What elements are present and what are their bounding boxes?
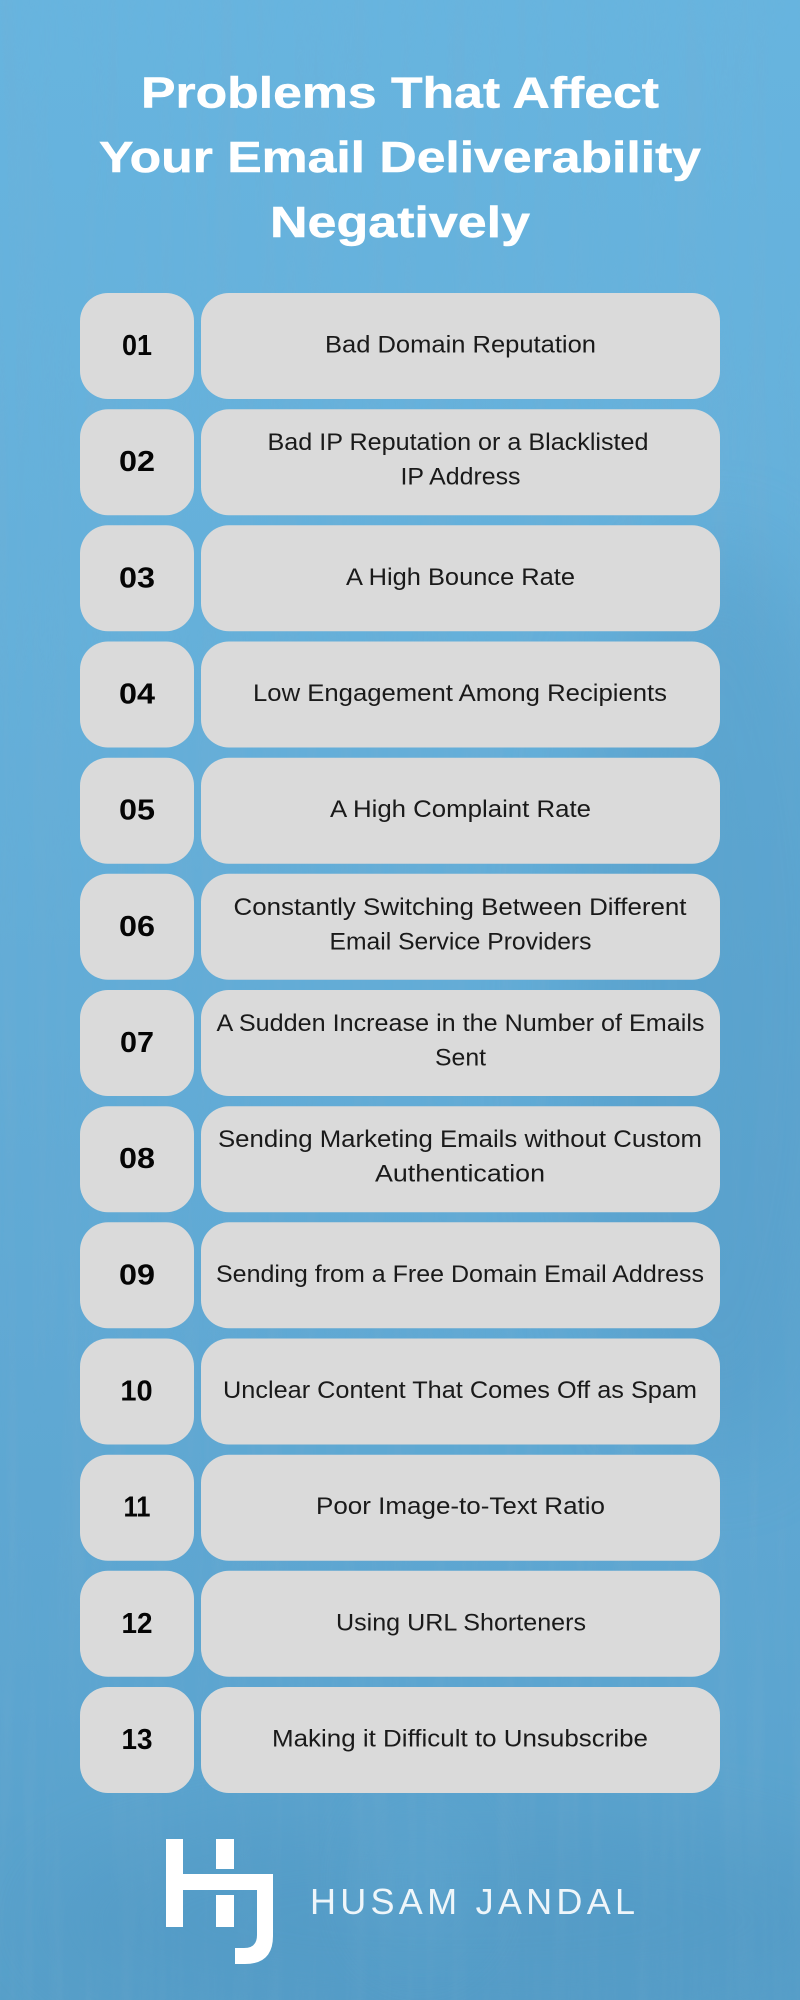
row 06: 06 <box>119 911 155 943</box>
row 12: Using URL Shorteners <box>336 1609 586 1636</box>
row 06: Constantly Switching Between Different <box>234 894 687 921</box>
row 03: 03 <box>119 562 155 594</box>
title: Your Email Deliverability <box>99 133 702 182</box>
row 11 <box>80 1455 720 1561</box>
row 13: 13 <box>122 1724 152 1756</box>
row 08: 08 <box>119 1143 155 1175</box>
row 07 <box>80 990 720 1096</box>
row 01 <box>80 293 720 399</box>
row 04: Low Engagement Among Recipients <box>253 680 667 707</box>
row 13: Making it Difficult to Unsubscribe <box>272 1726 648 1752</box>
row 04: 04 <box>119 678 155 710</box>
title: Negatively <box>270 198 531 247</box>
row 05: A High Complaint Rate <box>330 796 591 823</box>
row 04 <box>80 642 720 748</box>
row 03: A High Bounce Rate <box>346 564 575 591</box>
row 11: 11 <box>124 1492 150 1524</box>
row 03 <box>80 525 720 631</box>
row 02 <box>80 409 720 515</box>
row 10: Unclear Content That Comes Off as Spam <box>223 1377 697 1404</box>
row 08: Sending Marketing Emails without Custom <box>218 1126 702 1153</box>
row 10: 10 <box>120 1376 153 1408</box>
logo <box>166 1839 635 1964</box>
row 01: Bad Domain Reputation <box>325 332 596 358</box>
row 06: Email Service Providers <box>330 928 592 955</box>
row 02: Bad IP Reputation or a Blacklisted <box>268 429 648 456</box>
row 01: 01 <box>122 330 152 362</box>
row 07: A Sudden Increase in the Number of Emails <box>216 1010 704 1037</box>
row 02: IP Address <box>400 464 520 491</box>
row 13 <box>80 1687 720 1793</box>
list of problems <box>80 293 720 1793</box>
row 06 <box>80 874 720 980</box>
row 12 <box>80 1571 720 1677</box>
row 09 <box>80 1222 720 1328</box>
row 08: Authentication <box>375 1161 545 1188</box>
title: Problems That Affect <box>141 68 659 118</box>
row 07: 07 <box>120 1027 154 1059</box>
icon: HJ monogram <box>166 1839 273 1964</box>
title <box>99 68 702 247</box>
row 12: 12 <box>122 1608 152 1640</box>
row 05 <box>80 758 720 864</box>
row 09: 09 <box>119 1259 155 1291</box>
row 08 <box>80 1106 720 1212</box>
row 05: 05 <box>119 795 155 827</box>
row 11: Poor Image-to-Text Ratio <box>316 1493 605 1520</box>
brand name: HUSAM JANDAL <box>310 1881 635 1922</box>
row 10 <box>80 1338 720 1444</box>
row 09: Sending from a Free Domain Email Address <box>216 1261 704 1288</box>
row 07: Sent <box>435 1044 486 1072</box>
row 02: 02 <box>119 446 155 478</box>
